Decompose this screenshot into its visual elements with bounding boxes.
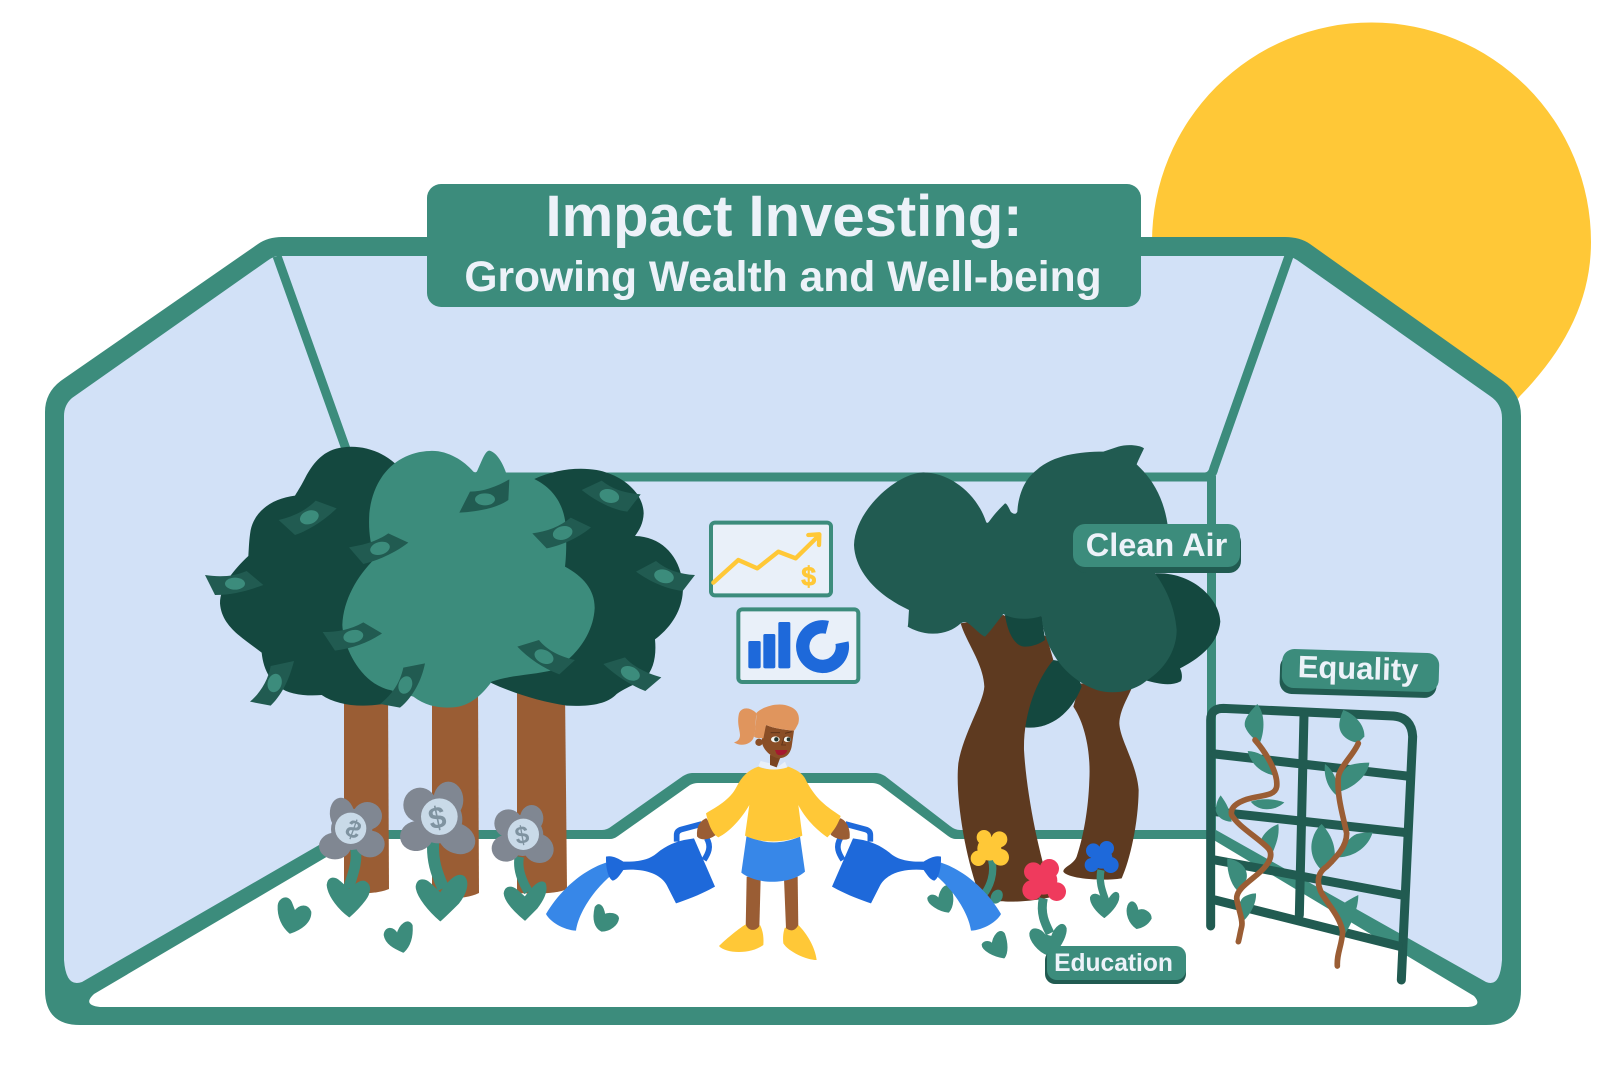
red flower leaves: [1030, 925, 1066, 955]
equality label: Equality: [1297, 649, 1420, 688]
lower foliage: [1025, 660, 1082, 728]
inner foliage: [1005, 615, 1045, 647]
ground flowers: [971, 830, 1151, 933]
money trees: [205, 447, 695, 898]
education label: [1045, 946, 1186, 984]
money flowers and sprouts: [279, 782, 559, 952]
title line 2: Growing Wealth and Well-being: [464, 253, 1102, 301]
education label: Education: [1054, 950, 1173, 977]
yellow flower: [971, 830, 1009, 906]
chart panels: [711, 523, 858, 682]
vines: [1231, 740, 1358, 966]
sun: [1152, 22, 1591, 420]
rear trunk: [1063, 683, 1139, 880]
trellis frame: [1211, 708, 1413, 980]
rear canopy: [1140, 573, 1220, 684]
large tree: [854, 445, 1220, 902]
main trunk: [958, 615, 1053, 902]
room frame: [45, 237, 1521, 1025]
legs: [746, 877, 798, 931]
flower 3: [492, 805, 559, 920]
hands: [698, 819, 849, 839]
head: [734, 704, 799, 767]
main canopy: [854, 445, 1177, 692]
title line 1: Impact Investing:: [546, 184, 1022, 249]
flower 2: $: [425, 800, 449, 837]
title banner: [427, 184, 1141, 307]
flower 2: [398, 782, 481, 921]
person with watering cans: [546, 704, 1006, 960]
sweater: [706, 767, 841, 841]
blue flower: [1085, 841, 1119, 917]
skirt: [741, 835, 805, 882]
canopies and banknotes: [205, 447, 695, 708]
sprouts near cans: [594, 886, 1006, 957]
bar and donut panel: [738, 609, 858, 682]
right watering can: [832, 824, 1001, 931]
shoes: [719, 924, 817, 960]
clean air label: Clean Air: [1086, 527, 1228, 563]
leaves: [1216, 704, 1373, 937]
trunks: [344, 690, 567, 898]
clean air label: [1073, 524, 1241, 573]
equality label: [1279, 649, 1440, 698]
flower 1: $: [342, 814, 365, 845]
left watering can: [546, 824, 715, 931]
line chart panel: [711, 523, 831, 595]
line chart panel: $: [801, 561, 816, 591]
sprouts: [279, 898, 412, 952]
flower 3: $: [513, 821, 531, 850]
sprout: [1128, 902, 1151, 928]
flower 1: [319, 796, 385, 917]
trellis with vines: [1211, 704, 1413, 980]
red flower: [1022, 859, 1066, 933]
collar: [758, 761, 787, 769]
